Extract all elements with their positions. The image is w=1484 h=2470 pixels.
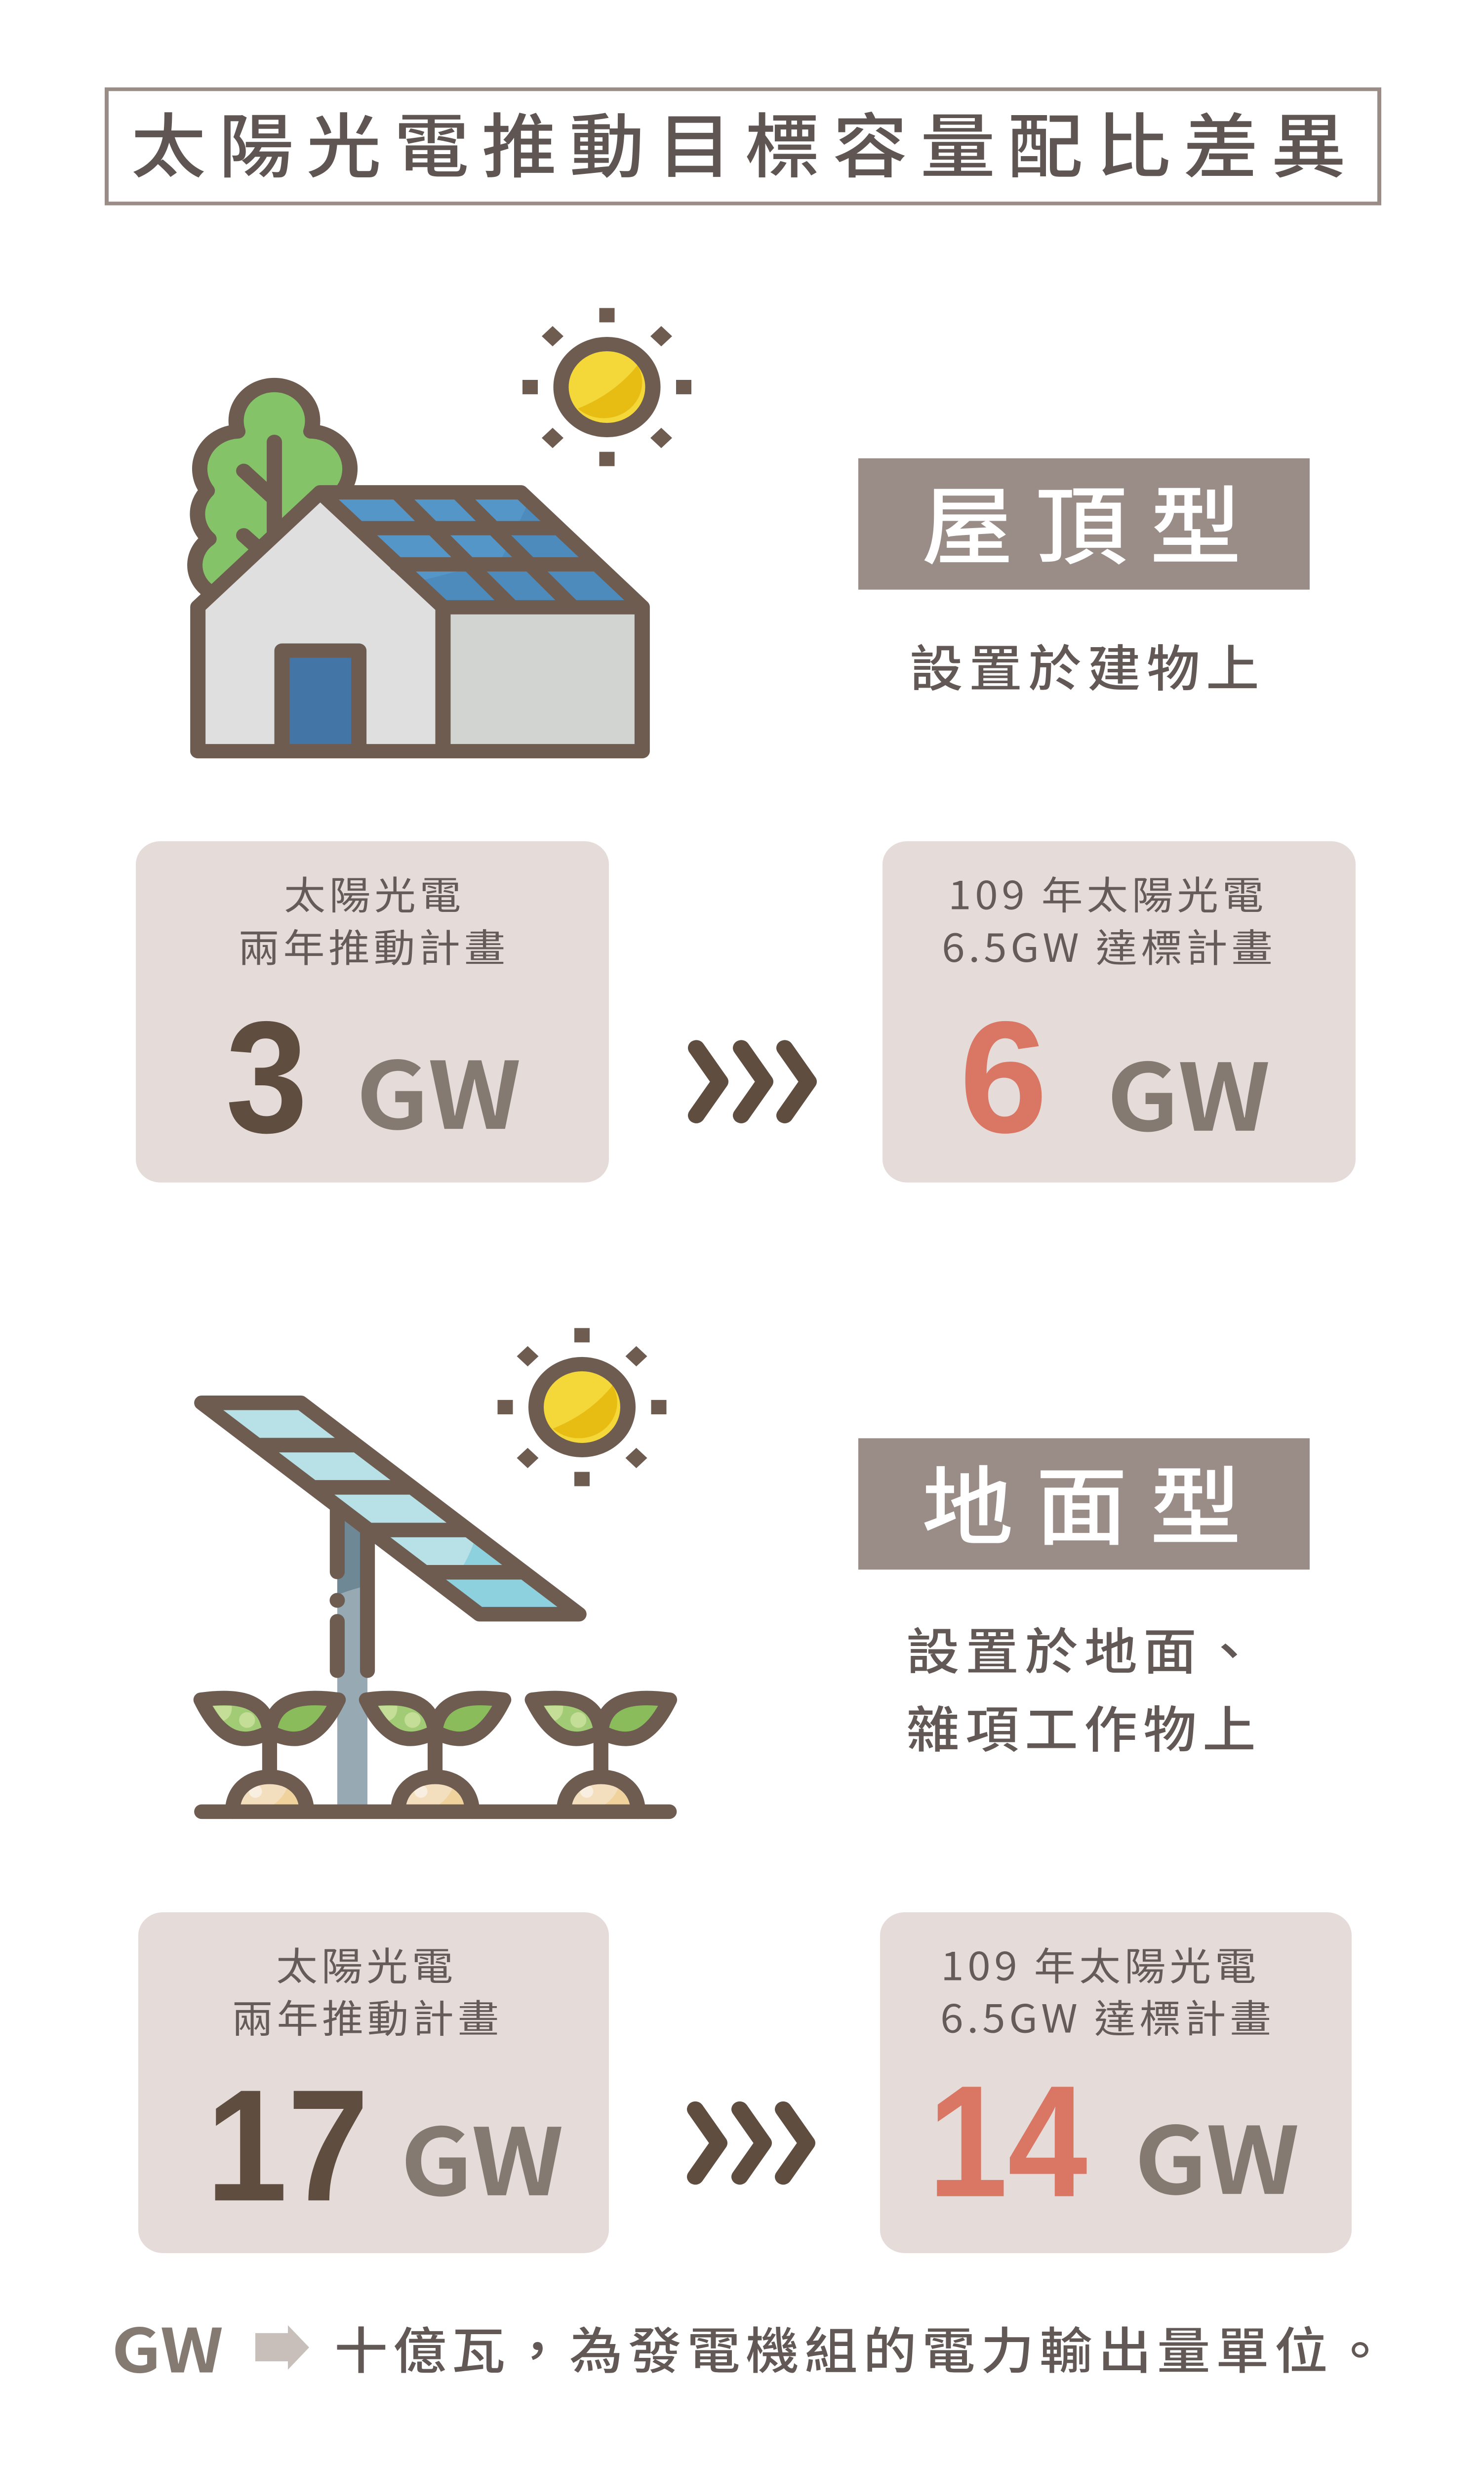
card: rooftop two-year plan 3 GW: 太陽光電 bbox=[284, 865, 465, 921]
card: rooftop two-year plan 3 GW bbox=[136, 841, 609, 1183]
card: rooftop 6.5GW plan 6 GW: 6.5GW 達標計畫 bbox=[942, 917, 1277, 973]
text: ground-mounted description: 雜項工作物上 bbox=[906, 1690, 1262, 1763]
text: ground-mounted description: 設置於地面、 bbox=[906, 1612, 1262, 1684]
arrow: ground chevrons bbox=[695, 2109, 807, 2177]
card: ground two-year plan 17 GW: 太陽光電 bbox=[276, 1936, 457, 1992]
text: rooftop description: 設置於建物上 bbox=[910, 629, 1265, 701]
card: rooftop 6.5GW plan 6 GW bbox=[882, 841, 1356, 1183]
icon: sun bbox=[522, 308, 691, 466]
icon: arrow bbox=[255, 2325, 309, 2370]
card: ground 6.5GW plan 14 GW: 14 bbox=[928, 2052, 1088, 2230]
card: ground two-year plan 17 GW bbox=[138, 1912, 609, 2253]
title: 太陽光電推動目標容量配比差異 bbox=[131, 90, 1359, 192]
icon: sun bbox=[498, 1328, 667, 1486]
heading: rooftop: 屋頂型 bbox=[922, 457, 1264, 582]
card: rooftop two-year plan 3 GW: 兩年推動計畫 bbox=[238, 917, 509, 973]
card: ground 6.5GW plan 14 GW: 109 年太陽光電 bbox=[941, 1936, 1260, 1992]
icon: ground solar panel with plants bbox=[201, 1403, 670, 1811]
footnote term: GW bbox=[112, 2302, 223, 2390]
icon: seedling 2 bbox=[366, 1698, 504, 1811]
footnote bbox=[112, 2302, 1392, 2390]
card: ground two-year plan 17 GW: 兩年推動計畫 bbox=[232, 1988, 503, 2044]
card: ground two-year plan 17 GW: GW bbox=[401, 2088, 563, 2222]
text: ground-mounted description bbox=[906, 1612, 1262, 1763]
card: ground two-year plan 17 GW: 17 bbox=[206, 2056, 369, 2234]
card: rooftop two-year plan 3 GW: 3 bbox=[226, 988, 308, 1166]
footnote text: 十億瓦，為發電機組的電力輸出量單位。 bbox=[334, 2311, 1392, 2384]
icon: seedling 3 bbox=[532, 1698, 670, 1811]
icon: house with rooftop solar and tree bbox=[195, 385, 642, 751]
heading: ground-mounted: 地面型 bbox=[922, 1438, 1264, 1563]
arrow: rooftop chevrons bbox=[696, 1048, 808, 1115]
card: rooftop 6.5GW plan 6 GW: 6 bbox=[960, 988, 1047, 1166]
card: ground 6.5GW plan 14 GW bbox=[880, 1912, 1352, 2253]
icon: seedling 1 bbox=[201, 1698, 338, 1811]
card: ground 6.5GW plan 14 GW: 6.5GW 達標計畫 bbox=[940, 1988, 1275, 2044]
card: rooftop two-year plan 3 GW: GW bbox=[356, 1022, 521, 1155]
card: rooftop 6.5GW plan 6 GW: GW bbox=[1107, 1023, 1270, 1157]
card: ground 6.5GW plan 14 GW: GW bbox=[1134, 2087, 1299, 2221]
panel: ground-mounted type bbox=[201, 1328, 1310, 1811]
panel: rooftop type bbox=[195, 308, 1310, 751]
card: rooftop 6.5GW plan 6 GW: 109 年太陽光電 bbox=[948, 865, 1267, 921]
